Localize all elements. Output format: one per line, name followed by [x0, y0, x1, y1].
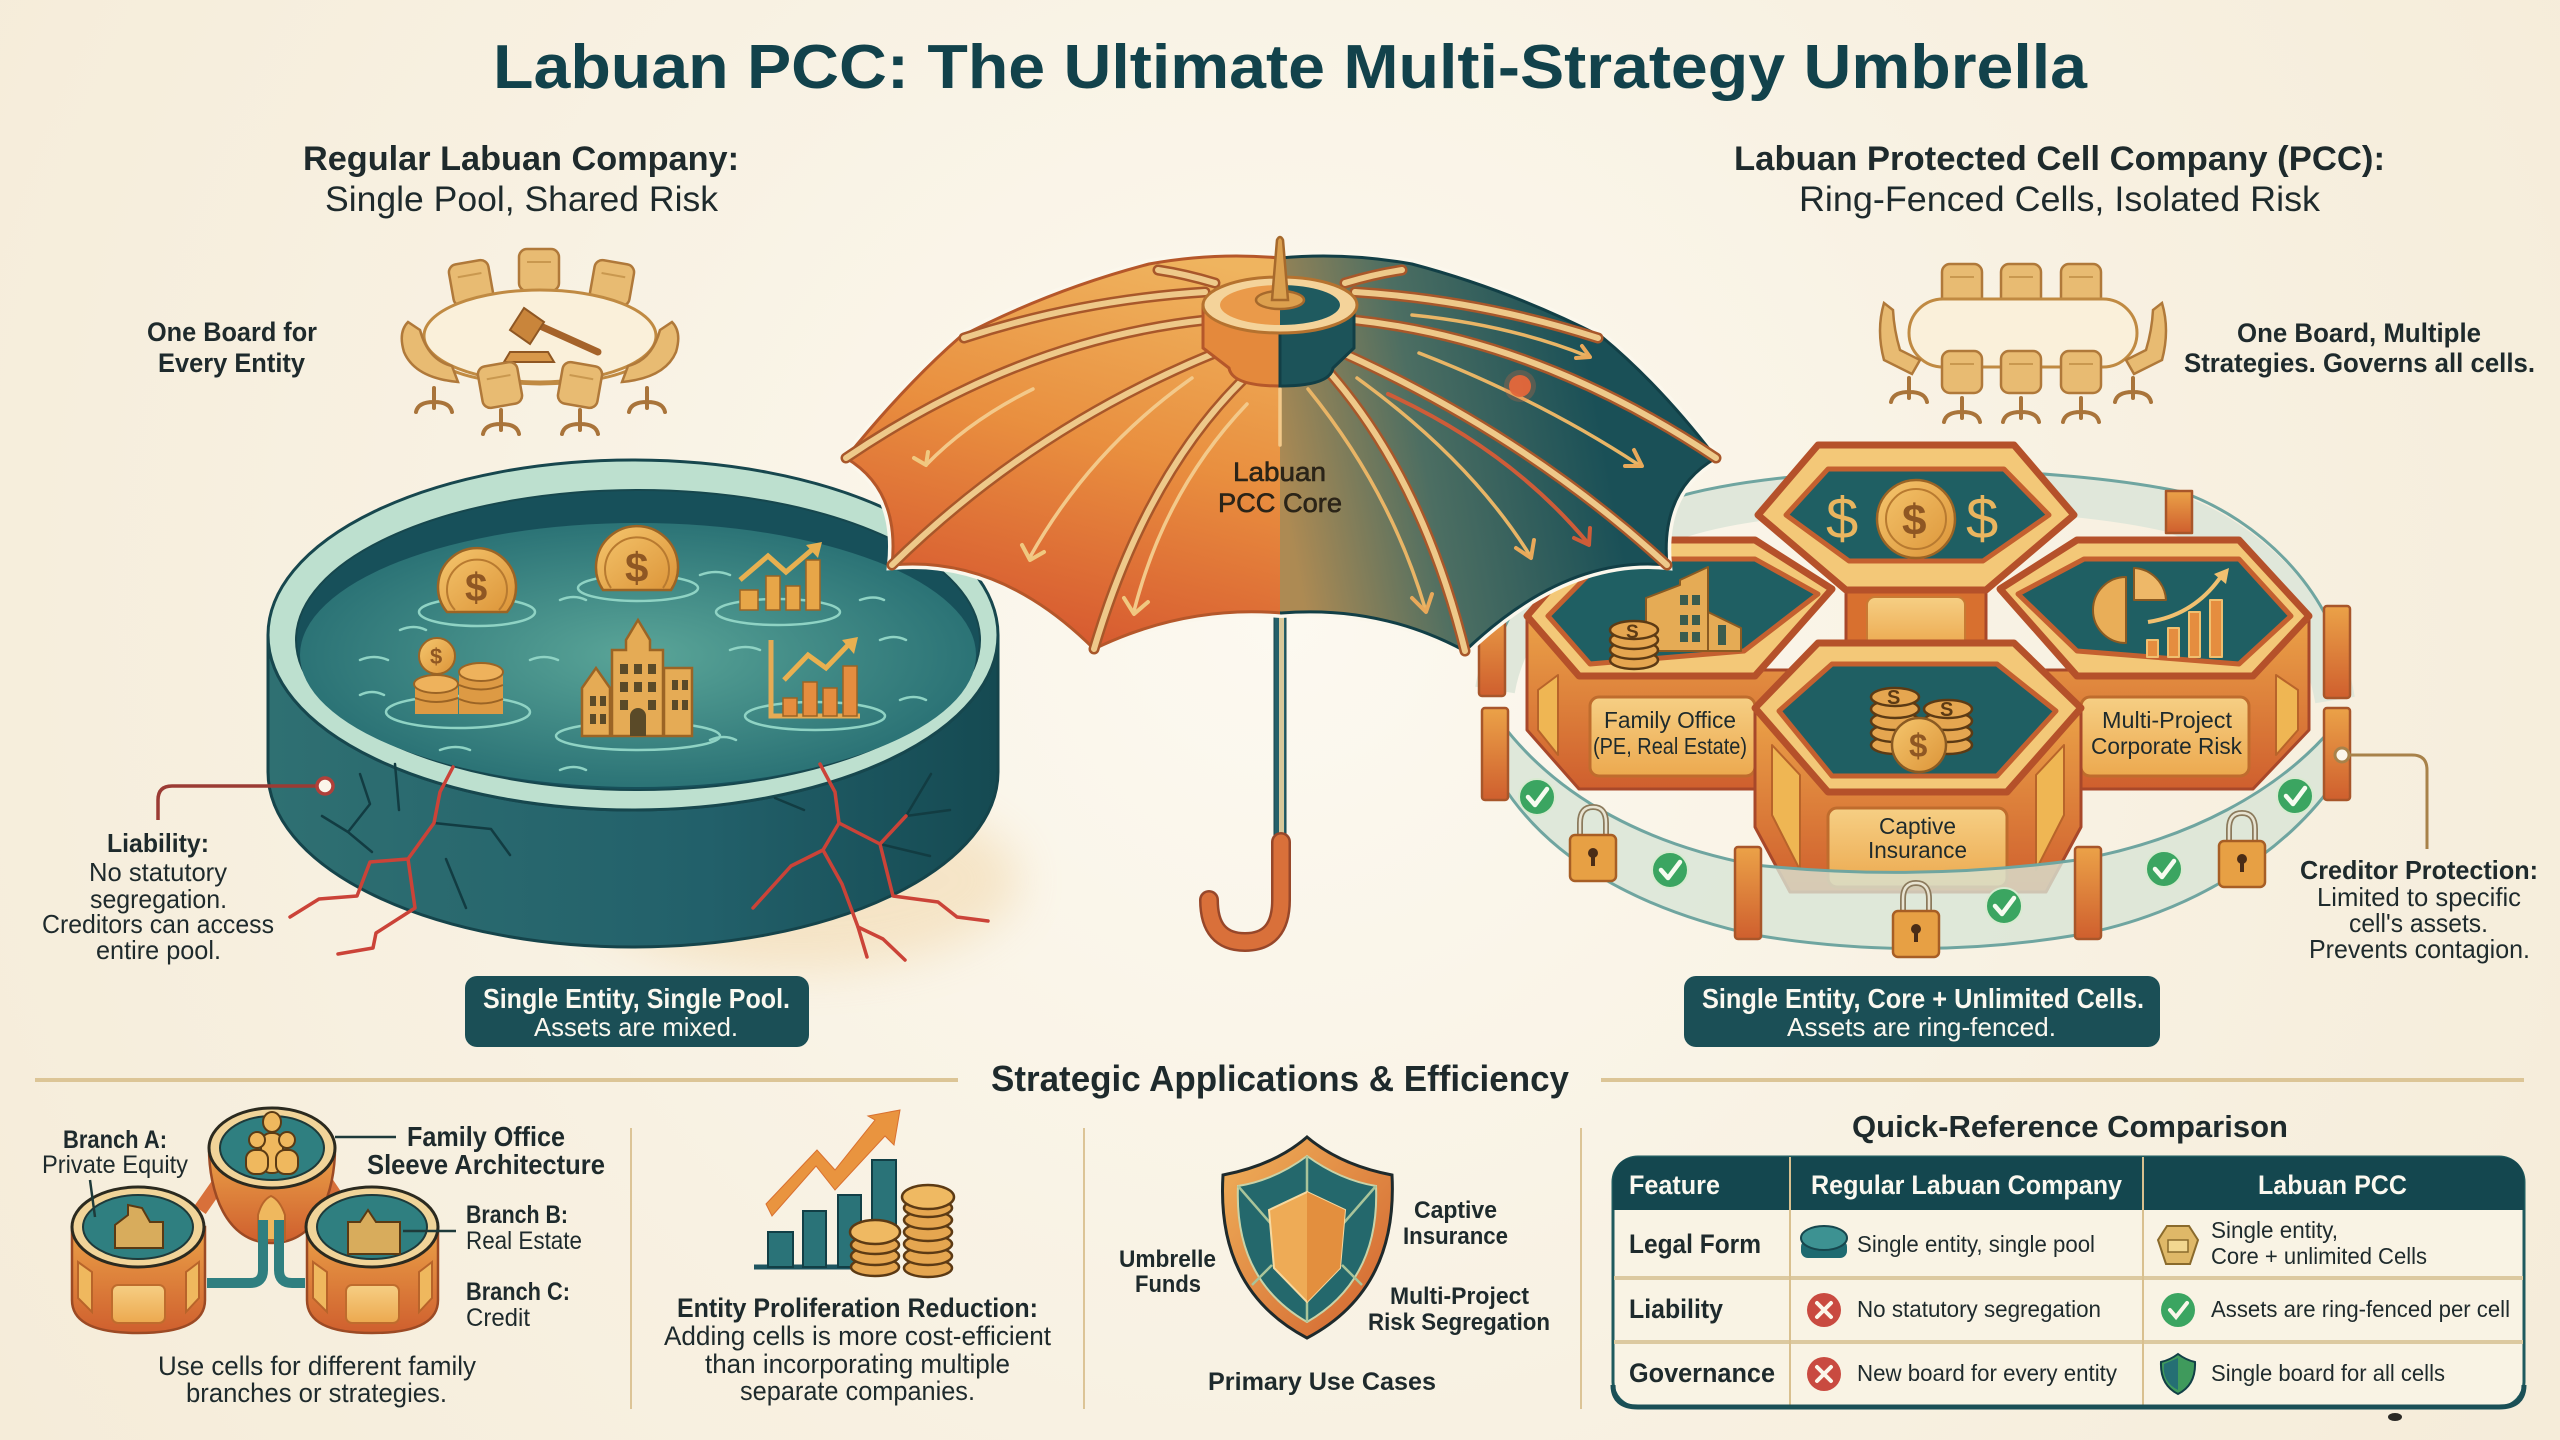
icon: dark wall fractures	[322, 764, 950, 908]
icon: red fractures	[290, 764, 988, 960]
heading: regular Labuan company: Regular Labuan Company:	[303, 140, 739, 178]
icon: floating coin stack: $	[430, 644, 442, 669]
fence: back ring	[1490, 470, 2345, 700]
row: liability: No statutory segregation	[1857, 1296, 2101, 1322]
panel: entity proliferation reduction	[664, 1110, 1051, 1406]
row: legal form: Core + unlimited Cells	[2211, 1243, 2427, 1269]
cell: captive insurance: $	[1909, 727, 1927, 764]
heading: Labuan protected cell company: Ring-Fenced Cells, Isolated Risk	[1799, 180, 2320, 219]
umbrella: central hub	[1203, 237, 1357, 386]
cell: multi-project corporate risk: Corporate Risk	[2091, 733, 2242, 759]
text: creditor protection note: cell's assets.	[2349, 908, 2488, 938]
icon: floating growth chart	[771, 637, 860, 716]
text: branch labels: Branch A:	[63, 1126, 167, 1154]
text: use case labels: Funds	[1135, 1271, 1201, 1298]
umbrella: handle	[1209, 842, 1281, 942]
label: one board multiple strategies	[2184, 318, 2535, 378]
cell: family office: (PE, Real Estate)	[1593, 733, 1747, 759]
icon: floating coin: $	[465, 566, 487, 610]
text: proliferation description: than incorporating multiple	[705, 1349, 1010, 1379]
locks on fence	[1570, 807, 2265, 957]
text: use case labels: Captive	[1414, 1197, 1497, 1224]
cell: captive insurance	[1755, 643, 2081, 892]
row: governance: Governance	[1629, 1358, 1775, 1388]
callout: creditor protection leader line	[2335, 748, 2427, 849]
fence: front ring-fence band	[1502, 724, 2337, 948]
cell: captive insurance: S	[1887, 687, 1900, 709]
row: liability: Assets are ring-fenced per cell	[2211, 1296, 2510, 1322]
text: use case labels: Umbrelle	[1119, 1246, 1216, 1273]
section heading with rules	[35, 1058, 2524, 1099]
illustration: ring-fenced protected cells	[1479, 445, 2350, 957]
icon: shield	[1222, 1137, 1392, 1338]
icon: round boardroom table with gavel	[402, 249, 678, 434]
heading: regular Labuan company	[303, 140, 739, 219]
panel: family office sleeve architecture	[42, 1108, 605, 1408]
text: proliferation description: Entity Proliferation Reduction:	[677, 1293, 1038, 1323]
fence posts	[1479, 604, 2350, 939]
cell: captive insurance: Insurance	[1868, 837, 1967, 863]
icon: leader lines	[90, 1137, 456, 1231]
divider	[1580, 1128, 1582, 1409]
callout: liability leader line	[158, 778, 333, 820]
illustration: cracked shared pool	[268, 460, 1020, 970]
text: proliferation description	[664, 1293, 1051, 1406]
row: liability: Liability	[1629, 1294, 1723, 1324]
text: family office description	[158, 1351, 476, 1408]
text: proliferation description: Adding cells is more cost-efficient	[664, 1321, 1051, 1351]
cell: family office: S	[1626, 622, 1639, 643]
text: family office description: Use cells for different family	[158, 1351, 476, 1381]
divider	[1083, 1128, 1085, 1409]
cell: family office	[1527, 540, 1832, 789]
cell: top treasury cell: $	[1826, 486, 1858, 551]
label: one board for every entity: One Board for	[147, 317, 317, 347]
text: branch labels: Real Estate	[466, 1227, 582, 1255]
icon: floating bar chart	[740, 542, 822, 610]
umbrella: canopy	[846, 256, 1716, 651]
text: liability note	[42, 828, 274, 965]
text: creditor protection note	[2300, 855, 2538, 964]
title: Labuan PCC: The Ultimate Multi-Strategy Umbrella	[493, 33, 2088, 102]
text: use case labels	[1119, 1197, 1550, 1396]
checkmarks on fence	[1519, 778, 2313, 924]
text: use case labels: Insurance	[1403, 1223, 1508, 1250]
label: one board multiple strategies: One Board, Multiple	[2237, 318, 2481, 348]
text: branch labels: Sleeve Architecture	[367, 1149, 605, 1180]
panel: quick-reference comparison table	[1613, 1109, 2524, 1407]
label: one board multiple strategies: Strategies. Governs all cells.	[2184, 348, 2535, 378]
text: branch labels: Credit	[466, 1304, 530, 1332]
text: branch labels: Family Office	[407, 1121, 565, 1152]
section heading with rules: Strategic Applications & Efficiency	[991, 1058, 1569, 1099]
table frame and header row: Labuan PCC	[2258, 1170, 2407, 1200]
text: creditor protection note: Limited to specific	[2317, 882, 2521, 912]
umbrella: hot spot	[1504, 370, 1536, 402]
row: legal form	[1629, 1217, 2427, 1269]
umbrella: core label	[1218, 457, 1342, 518]
row: legal form: Single entity,	[2211, 1217, 2338, 1243]
label: one board for every entity: Every Entity	[158, 348, 305, 378]
divider	[630, 1128, 632, 1409]
row: legal form: Legal Form	[1629, 1229, 1761, 1259]
cell: top treasury cell: $	[1966, 486, 1998, 551]
text: proliferation description: separate companies.	[740, 1376, 975, 1406]
illustration: Labuan PCC umbrella	[846, 237, 1716, 942]
text: family office description: branches or strategies.	[186, 1378, 447, 1408]
text: branch labels	[42, 1121, 605, 1332]
icon: growth chart with coin stacks	[754, 1110, 954, 1277]
callout: single entity core plus unlimited cells: Single Entity, Core + Unlimited Cells.	[1702, 983, 2144, 1014]
umbrella: core label: Labuan	[1233, 457, 1326, 487]
heading: Labuan protected cell company: Labuan Protected Cell Company (PCC):	[1734, 140, 2385, 178]
heading: Labuan protected cell company	[1734, 140, 2385, 219]
icon: floating coin stack	[414, 638, 503, 714]
callout: single entity single pool: Single Entity, Single Pool.	[483, 983, 790, 1014]
text: liability note: Liability:	[107, 828, 209, 858]
text: branch labels: Branch C:	[466, 1278, 570, 1306]
text: use case labels: Primary Use Cases	[1208, 1368, 1436, 1396]
callout: single entity single pool	[465, 976, 809, 1047]
cell: multi-project corporate risk	[2000, 540, 2309, 789]
callout: single entity single pool: Assets are mixed.	[534, 1012, 738, 1042]
icon: floating coin	[438, 548, 516, 612]
icon: floating coin: $	[625, 544, 648, 591]
cell: family office: Family Office	[1604, 707, 1736, 733]
cell: captive insurance: S	[1940, 699, 1953, 721]
text: branch labels: Private Equity	[42, 1151, 188, 1179]
umbrella: cascading arrows	[914, 315, 1642, 614]
icon: connected family cells	[72, 1108, 438, 1333]
cell: captive insurance: Captive	[1879, 813, 1956, 839]
cell: top treasury cell	[1758, 445, 2074, 660]
panel: primary use cases	[1119, 1137, 1550, 1396]
umbrella: shaft	[1274, 610, 1286, 838]
table frame and header row: Feature	[1629, 1170, 1720, 1200]
text: creditor protection note: Prevents contagion.	[2309, 934, 2530, 964]
row: governance: New board for every entity	[1857, 1360, 2117, 1386]
row: governance: Single board for all cells	[2211, 1360, 2445, 1386]
umbrella: core label: PCC Core	[1218, 488, 1342, 518]
icon: boardroom table with cell governance	[1880, 264, 2166, 422]
table frame and header row: Regular Labuan Company	[1811, 1170, 2122, 1200]
cell: top treasury cell: $	[1902, 496, 1926, 545]
callout: single entity core plus unlimited cells: Assets are ring-fenced.	[1787, 1012, 2056, 1042]
row: legal form: Single entity, single pool	[1857, 1231, 2095, 1257]
text: branch labels: Branch B:	[466, 1201, 568, 1229]
text: use case labels: Risk Segregation	[1368, 1309, 1550, 1336]
row: liability	[1629, 1293, 2510, 1327]
icon: floating coin	[596, 526, 678, 591]
table heading: Quick-Reference Comparison	[1852, 1109, 2288, 1144]
text: liability note: Creditors can access	[42, 909, 274, 939]
post: rear fence post	[2166, 491, 2192, 533]
heading: regular Labuan company: Single Pool, Shared Risk	[325, 180, 719, 219]
icon: floating office building	[582, 620, 692, 736]
text: liability note: entire pool.	[96, 935, 221, 965]
label: one board for every entity	[147, 317, 317, 378]
text: liability note: segregation.	[90, 884, 227, 914]
callout: single entity core plus unlimited cells	[1684, 976, 2160, 1047]
cell: multi-project corporate risk: Multi-Project	[2102, 707, 2233, 733]
small ink mark	[2388, 1413, 2402, 1421]
text: liability note: No statutory	[89, 857, 227, 887]
table frame and header row	[1613, 1157, 2524, 1407]
text: creditor protection note: Creditor Protection:	[2300, 855, 2538, 885]
row: governance	[1629, 1354, 2445, 1394]
text: use case labels: Multi-Project	[1390, 1283, 1529, 1310]
